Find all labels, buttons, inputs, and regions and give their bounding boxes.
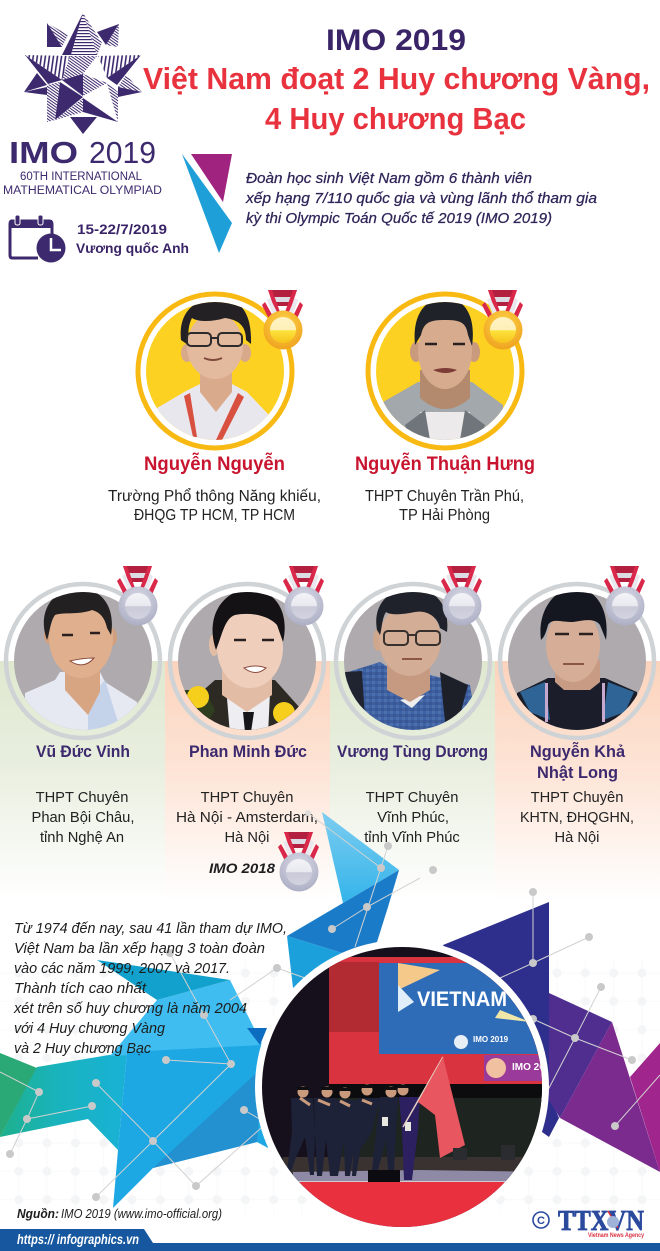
polygons: right purple cluster [443, 902, 660, 1172]
school: Nguyễn Khả Nhật Long: KHTN, ĐHQGHN, [520, 810, 634, 826]
intro text: kỳ thi Olympic Toán Quốc tế 2019 (IMO 2019) [246, 210, 552, 227]
school: Vũ Đức Vinh: Phan Bội Châu, [32, 810, 134, 826]
footer band: https:// infographics.vn [17, 1231, 139, 1247]
title [143, 24, 650, 136]
school: Vương Tùng Dương [364, 790, 460, 846]
icon: calendar clock [10, 215, 66, 262]
school: Nguyễn Khả Nhật Long [520, 790, 634, 846]
flag [403, 1057, 465, 1158]
stage banner [484, 1055, 545, 1081]
portrait: Phan Minh Đức [170, 584, 324, 738]
body text: achievements: Việt Nam ba lần xếp hạng 3 toàn đoàn [14, 940, 265, 957]
logo wordmark [3, 135, 162, 197]
source: Nguồn: [17, 1206, 59, 1221]
body text: achievements: Từ 1974 đến nay, sau 41 lần tham dự IMO, [14, 920, 287, 937]
title: Việt Nam đoạt 2 Huy chương Vàng, [143, 61, 650, 96]
body text: achievements: với 4 Huy chương Vàng [14, 1020, 166, 1037]
background panels: silver medalists [0, 661, 660, 901]
intro text: xếp hạng 7/110 quốc gia và vùng lãnh thổ tham gia [245, 190, 597, 207]
logo wordmark: MATHEMATICAL OLYMPIAD [3, 185, 162, 197]
body text: achievements: xét trên số huy chương là năm 2004 [13, 1000, 247, 1017]
school: Nguyễn Khả Nhật Long: Hà Nội [555, 830, 599, 846]
blue polygon cluster: upper centre [287, 812, 399, 988]
school: Phan Minh Đức [176, 790, 318, 846]
medal: silver IMO 2018 [278, 832, 319, 892]
medal: silver 3 [441, 566, 482, 626]
logo wordmark: 60TH INTERNATIONAL [20, 171, 143, 183]
date and place [76, 221, 189, 256]
school: Nguyễn Nguyễn: ĐHQG TP HCM, TP HCM [134, 507, 295, 524]
school: Nguyễn Nguyễn: Trường Phổ thông Năng khiếu, [108, 488, 321, 505]
stage screen: IMO 2019 [473, 1035, 509, 1044]
photo: Vietnam team on stage [255, 940, 550, 1234]
name: Nguyễn Nguyễn: Nguyễn Nguyễn [144, 453, 285, 475]
name: Nguyễn Khả Nhật Long [530, 742, 626, 782]
footer band [0, 1229, 660, 1251]
stage screen: VIETNAM [417, 988, 507, 1011]
medal: silver 4 [604, 566, 645, 626]
name: Nguyễn Khả Nhật Long: Nhật Long [537, 764, 618, 782]
body text: achievements [13, 920, 287, 1057]
team members [287, 1084, 420, 1180]
stage banner: IMO 20 [512, 1062, 545, 1073]
name: Vương Tùng Dương: Vương Tùng Dương [337, 743, 488, 761]
portrait: Vũ Đức Vinh [6, 584, 160, 738]
school: Vũ Đức Vinh [32, 790, 134, 846]
name: Nguyễn Thuận Hưng: Nguyễn Thuận Hưng [355, 453, 535, 475]
school: Nguyễn Thuận Hưng: TP Hải Phòng [399, 507, 490, 524]
background dot grid [0, 959, 660, 1214]
date and place: 15-22/7/2019 [77, 221, 167, 237]
body text: achievements: vào các năm 1999, 2007 và 2017. [14, 960, 230, 977]
date and place: Vương quốc Anh [76, 240, 189, 256]
logo: TTXVN: Vietnam News Agency [588, 1232, 644, 1239]
portrait: Vương Tùng Dương [336, 584, 490, 738]
portrait: Nguyễn Thuận Hưng [368, 294, 522, 448]
school: Phan Minh Đức: THPT Chuyên [201, 790, 293, 806]
title: 4 Huy chương Bạc [265, 101, 526, 136]
polygons: left colored cluster [0, 960, 268, 1208]
name: Phan Minh Đức: Phan Minh Đức [189, 743, 307, 761]
school: Vũ Đức Vinh: tỉnh Nghệ An [40, 830, 124, 846]
school: Vương Tùng Dương: THPT Chuyên [366, 790, 458, 806]
medal: gold 2 [482, 290, 523, 350]
school: Nguyễn Khả Nhật Long: THPT Chuyên [531, 790, 623, 806]
logo: IMO 2019 [3, 13, 162, 197]
body text: achievements: và 2 Huy chương Bạc [14, 1040, 151, 1057]
name: Vũ Đức Vinh: Vũ Đức Vinh [36, 743, 130, 761]
medal: gold 1 [262, 290, 303, 350]
logo wordmark: IMO [9, 135, 78, 170]
intro text [245, 170, 597, 227]
title: IMO 2019 [326, 24, 466, 57]
name: Nguyễn Khả Nhật Long: Nguyễn Khả [530, 742, 626, 761]
medal: silver 2 [283, 566, 324, 626]
logo: TTXVN [533, 1205, 644, 1239]
source: IMO 2019 (www.imo-official.org) [61, 1206, 222, 1221]
stage screen [379, 963, 539, 1054]
logo: TTXVN: TTXVN [558, 1205, 644, 1237]
school: Vương Tùng Dương: tỉnh Vĩnh Phúc [364, 830, 460, 846]
school: Vương Tùng Dương: Vĩnh Phúc, [377, 810, 449, 826]
school: Nguyễn Thuận Hưng [365, 488, 524, 524]
logo: TTXVN: C [537, 1215, 545, 1227]
logo star [24, 13, 142, 134]
network lines and nodes [0, 810, 660, 1201]
icon: decorative triangles [182, 154, 232, 253]
portrait: Nguyễn Nguyễn [138, 294, 292, 448]
logo wordmark: 2019 [89, 135, 156, 170]
school: Phan Minh Đức: Hà Nội [225, 830, 269, 846]
body text: achievements: Thành tích cao nhất [14, 980, 147, 997]
school: Phan Minh Đức: Hà Nội - Amsterdam, [176, 810, 318, 826]
label: IMO 2018: IMO 2018 [209, 860, 275, 876]
medal: silver 1 [117, 566, 158, 626]
school: Vũ Đức Vinh: THPT Chuyên [36, 790, 128, 806]
school: Nguyễn Thuận Hưng: THPT Chuyên Trần Phú, [365, 488, 524, 505]
portrait: Nguyễn Khả Nhật Long [500, 584, 654, 738]
school: Nguyễn Nguyễn [108, 488, 321, 524]
intro text: Đoàn học sinh Việt Nam gồm 6 thành viên [246, 170, 532, 187]
